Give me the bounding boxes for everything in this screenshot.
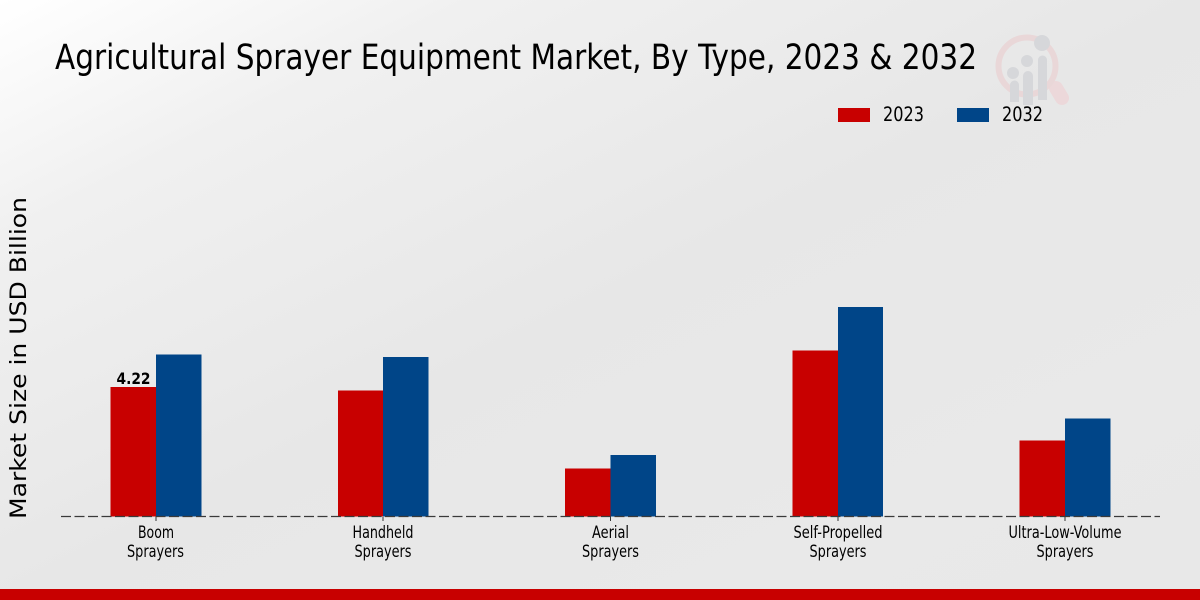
category label: Handheld Sprayers [352,523,414,561]
category label: Boom Sprayers: Sprayers [127,542,184,561]
bars: Boom Sprayers [110,354,202,516]
category label: Self-Propelled Sprayers [794,523,882,561]
watermark logo icon [998,35,1062,105]
title: Agricultural Sprayer Equipment Market, By Type, 2023 & 2032 [55,38,977,78]
category label: Boom Sprayers [127,523,184,561]
category label: Aerial Sprayers: Aerial [592,523,629,542]
bar chart [61,307,1160,521]
bars: Aerial Sprayers [565,455,656,516]
category label: Ultra-Low-Volume Sprayers [1008,523,1122,561]
category label: Handheld Sprayers: Sprayers [354,542,412,561]
legend swatch 2023 [838,108,870,122]
legend label 2023: 2023 [883,103,924,126]
x axis ticks [156,517,1065,521]
category label: Self-Propelled Sprayers: Self-Propelled [794,523,882,542]
legend [838,103,1043,126]
bars: Handheld Sprayers [338,357,428,516]
category label: Handheld Sprayers: Handheld [352,523,414,542]
category label: Self-Propelled Sprayers: Sprayers [810,542,866,561]
category label: Aerial Sprayers: Sprayers [582,542,639,561]
category label: Boom Sprayers: Boom [138,523,174,542]
data label 4.22: 4.22 [116,369,150,388]
footer bar [0,589,1200,600]
category label: Aerial Sprayers [582,523,639,561]
bars: Self-Propelled Sprayers [792,307,883,516]
legend label 2032: 2032 [1002,103,1043,126]
category label: Ultra-Low-Volume Sprayers: Ultra-Low-Volume [1008,523,1122,542]
bars: Ultra-Low-Volume Sprayers [1020,418,1110,516]
x axis baseline [61,516,1160,518]
category label: Ultra-Low-Volume Sprayers: Sprayers [1036,542,1094,561]
y axis label: Market Size in USD Billion [6,197,32,519]
legend swatch 2032 [957,108,989,122]
